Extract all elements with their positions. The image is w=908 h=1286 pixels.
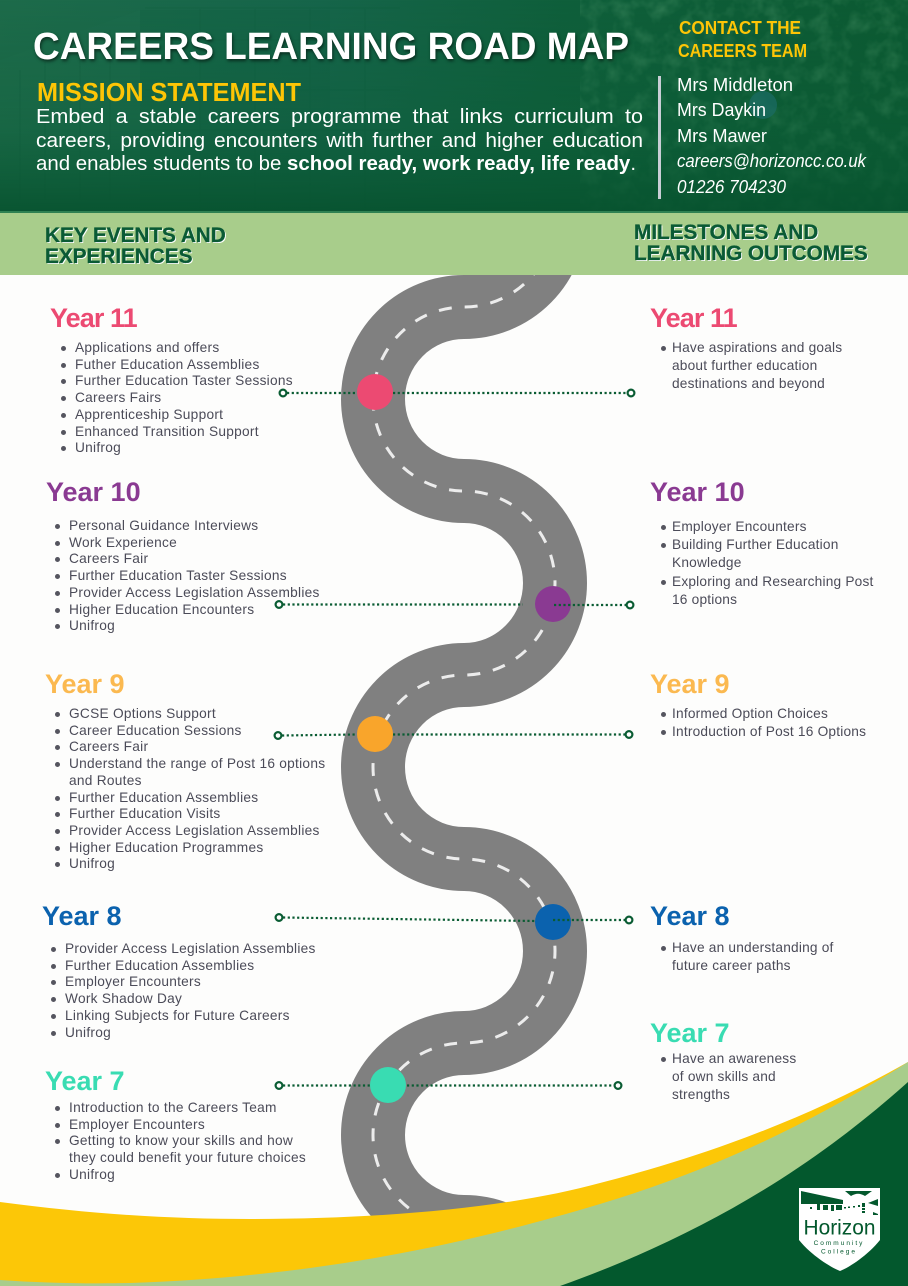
logo wordmark: Horizon — [804, 1216, 876, 1240]
list: destinations and beyond — [672, 376, 825, 391]
left panel: year 8 — [42, 901, 316, 1040]
list — [55, 706, 325, 871]
right panel: year 7 — [650, 1018, 796, 1102]
list: Further Education Taster Sessions — [75, 373, 293, 388]
contact details: Mrs Middleton — [677, 75, 793, 95]
shield — [799, 1188, 880, 1271]
list — [61, 340, 293, 455]
list — [661, 519, 874, 607]
list: Careers Fairs — [75, 390, 161, 405]
list: Further Education Visits — [69, 806, 221, 821]
list: of own skills and — [672, 1069, 776, 1084]
list — [661, 1051, 796, 1102]
list: about further education — [672, 358, 817, 373]
list — [661, 940, 834, 973]
list: Personal Guidance Interviews — [69, 518, 258, 533]
right panel: year 10 — [650, 477, 874, 607]
left panel: year 10 — [46, 477, 320, 633]
list: Career Education Sessions — [69, 723, 242, 738]
list: Have aspirations and goals — [672, 340, 842, 355]
list: Careers Fair — [69, 551, 148, 566]
heading: key events: KEY EVENTS AND — [45, 224, 226, 247]
contact details: 01226 704230 — [677, 177, 786, 197]
list: Careers Fair — [69, 739, 148, 754]
list: Futher Education Assemblies — [75, 357, 260, 372]
mission text: careers, providing encounters with further and higher education — [36, 130, 643, 152]
list: Work Shadow Day — [65, 991, 182, 1006]
contact divider — [658, 76, 661, 199]
connector: year 11 — [280, 374, 634, 410]
right panel: year 9 — [650, 669, 866, 739]
list — [55, 1100, 306, 1182]
list: Further Education Taster Sessions — [69, 568, 287, 583]
list: Employer Encounters — [65, 974, 201, 989]
list: Further Education Assemblies — [65, 958, 254, 973]
list: Have an awareness — [672, 1051, 796, 1066]
connector: year 10 — [276, 586, 633, 622]
list: 16 options — [672, 592, 737, 607]
heading: Year 8 — [42, 901, 122, 931]
list: Unifrog — [75, 440, 121, 455]
contact panel — [658, 17, 867, 199]
heading: milestones — [634, 221, 868, 265]
heading: Year 10 — [650, 477, 745, 507]
list: they could benefit your future choices — [69, 1150, 306, 1165]
right panel: year 11 — [650, 303, 842, 391]
contact details: Mrs Daykin — [677, 100, 766, 120]
heading: milestones: MILESTONES AND — [634, 221, 818, 244]
list: GCSE Options Support — [69, 706, 216, 721]
list: Unifrog — [69, 618, 115, 633]
contact details — [677, 75, 867, 197]
list — [661, 706, 866, 739]
contact heading: CAREERS TEAM — [678, 40, 807, 61]
heading: key events: EXPERIENCES — [45, 245, 192, 268]
list: Employer Encounters — [69, 1117, 205, 1132]
logo: Horizon Community College: Community — [814, 1240, 864, 1247]
list: Higher Education Programmes — [69, 840, 263, 855]
logo: Horizon Community College: College — [821, 1248, 857, 1256]
connector: year 7 — [276, 1067, 621, 1103]
right panel: year 8 — [650, 901, 834, 973]
contact heading — [678, 17, 807, 61]
list — [55, 518, 320, 633]
list: future career paths — [672, 958, 791, 973]
list: Getting to know your skills and how — [69, 1133, 293, 1148]
list: Unifrog — [69, 1167, 115, 1182]
list: and Routes — [69, 773, 142, 788]
list: Apprenticeship Support — [75, 407, 223, 422]
list: Provider Access Legislation Assemblies — [65, 941, 316, 956]
list: Higher Education Encounters — [69, 602, 254, 617]
mission heading: MISSION STATEMENT — [37, 79, 301, 107]
list: Provider Access Legislation Assemblies — [69, 585, 320, 600]
header banner — [0, 0, 908, 213]
left panel: year 7 — [45, 1066, 306, 1182]
list: Introduction to the Careers Team — [69, 1100, 277, 1115]
list: strengths — [672, 1087, 730, 1102]
list: Applications and offers — [75, 340, 219, 355]
heading: Year 9 — [650, 669, 730, 699]
list: Work Experience — [69, 535, 177, 550]
heading: Year 7 — [650, 1018, 730, 1048]
contact details: Mrs Mawer — [677, 126, 767, 146]
heading: Year 8 — [650, 901, 730, 931]
crest skyline — [801, 1191, 878, 1215]
heading: key events — [45, 224, 226, 268]
heading: Year 11 — [50, 303, 137, 333]
heading: Year 10 — [46, 477, 141, 507]
list: Unifrog — [69, 856, 115, 871]
title: CAREERS LEARNING ROAD MAP — [33, 25, 629, 68]
mission text: Embed a stable careers programme that links curriculum to — [36, 106, 643, 128]
heading: Year 11 — [650, 303, 737, 333]
contact heading: CONTACT THE — [679, 17, 801, 38]
left panel: year 9 — [45, 669, 325, 871]
list: Unifrog — [65, 1025, 111, 1040]
contact details: careers@horizoncc.co.uk — [677, 151, 867, 171]
list — [51, 941, 316, 1040]
list: Enhanced Transition Support — [75, 424, 259, 439]
connector: year 9 — [275, 716, 632, 752]
connector: year 8 — [276, 904, 632, 940]
heading: Year 9 — [45, 669, 125, 699]
heading: Year 7 — [45, 1066, 125, 1096]
list: Further Education Assemblies — [69, 790, 258, 805]
list: Building Further Education — [672, 537, 839, 552]
list: Provider Access Legislation Assemblies — [69, 823, 320, 838]
green column heading band — [0, 211, 908, 275]
list: Knowledge — [672, 555, 742, 570]
left panel: year 11 — [50, 303, 293, 455]
mission text: and enables students to be school ready, work ready, life ready. — [36, 153, 636, 175]
list — [661, 340, 842, 391]
heading: milestones: LEARNING OUTCOMES — [634, 242, 868, 265]
list: Introduction of Post 16 Options — [672, 724, 866, 739]
list: Employer Encounters — [672, 519, 807, 534]
list: Understand the range of Post 16 options — [69, 756, 325, 771]
mission statement — [36, 79, 643, 175]
list: Linking Subjects for Future Careers — [65, 1008, 290, 1023]
list: Exploring and Researching Post — [672, 574, 874, 589]
mission text — [36, 106, 643, 175]
list: Have an understanding of — [672, 940, 834, 955]
list: Informed Option Choices — [672, 706, 828, 721]
